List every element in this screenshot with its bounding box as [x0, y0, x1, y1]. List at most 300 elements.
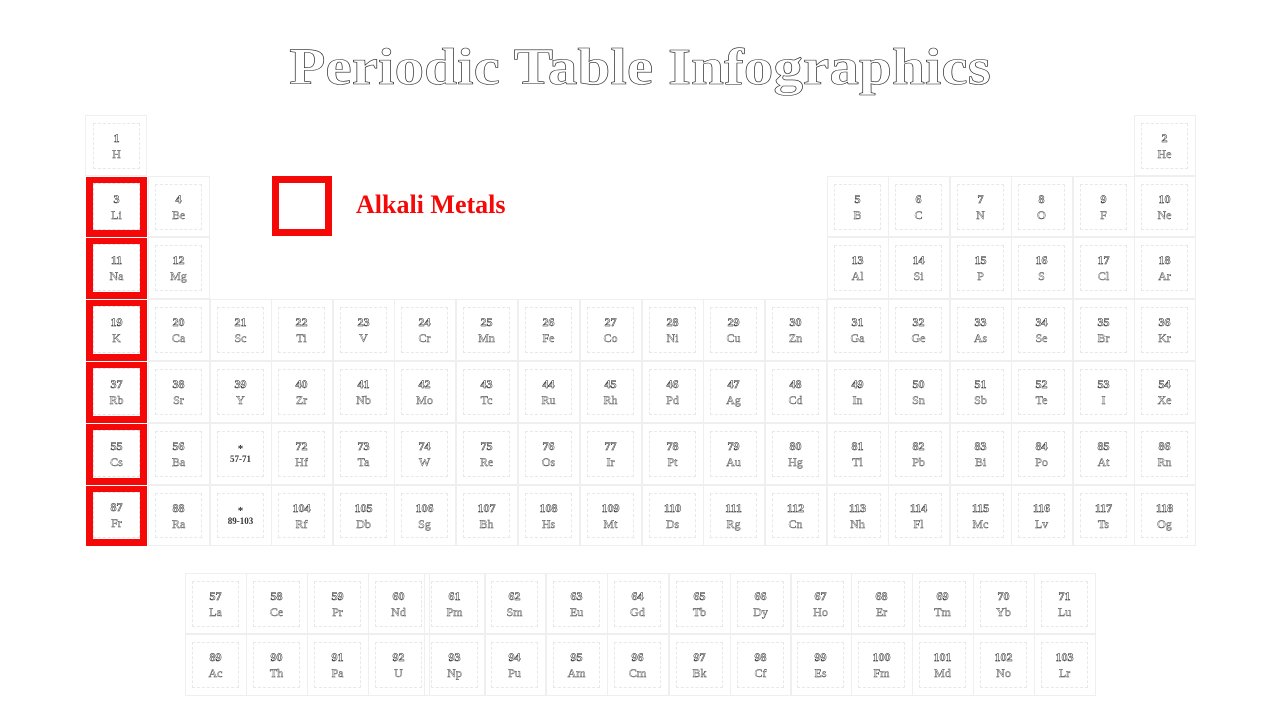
cell: Pr	[307, 573, 369, 634]
cell: Ru: 44	[542, 377, 554, 391]
cell: Sn: Sn	[912, 393, 925, 407]
cell: Mo: Mo	[416, 393, 433, 407]
cell: Mo: 42	[418, 377, 430, 391]
cell: Es	[790, 634, 852, 696]
cell: Bi	[950, 423, 1012, 485]
cell: F	[1073, 176, 1135, 237]
cell: I: 53	[1098, 377, 1110, 391]
cell: Pm: Pm	[446, 605, 462, 619]
cell: Er	[851, 573, 913, 634]
cell: Sm	[484, 573, 546, 634]
cell: Hf: Hf	[295, 455, 308, 469]
cell: lanthanide placeholder	[210, 423, 272, 485]
cell: Tb	[669, 573, 731, 634]
cell: Md: 101	[934, 650, 952, 664]
cell: Kr: Kr	[1158, 331, 1171, 345]
legend label: alkali metals: Alkali Metals	[356, 190, 506, 219]
cell: La	[185, 573, 247, 634]
cell: Os: Os	[542, 455, 555, 469]
cell: Ru	[518, 361, 580, 423]
cell: Bh	[456, 485, 518, 546]
cell: Y: 39	[234, 377, 246, 391]
cell: Dy	[730, 573, 792, 634]
cell: Er: 68	[876, 589, 888, 603]
cell: Pa	[307, 634, 369, 696]
cell: Os: 76	[542, 439, 554, 453]
cell: Tl	[827, 423, 889, 485]
cell: Mn: Mn	[478, 331, 495, 345]
cell: Nb: Nb	[356, 393, 371, 407]
cell: Fr: 87	[110, 500, 122, 514]
cell: Sb: 51	[974, 377, 986, 391]
cell: Bk: Bk	[692, 666, 706, 680]
cell: Nh: 113	[849, 500, 866, 514]
cell: Eu	[546, 573, 608, 634]
cell: Li: Li	[111, 208, 122, 222]
cell: Rn: 86	[1158, 439, 1170, 453]
cell: Pm	[424, 573, 486, 634]
cell: Mc: Mc	[972, 516, 988, 530]
cell: B: 5	[854, 192, 860, 206]
cell: Ra	[148, 485, 210, 546]
cell: Sn	[888, 361, 950, 423]
cell: K: K	[112, 330, 121, 344]
cell: Pd: 46	[666, 377, 678, 391]
cell: Po	[1011, 423, 1073, 485]
cell: At	[1073, 423, 1135, 485]
title: Periodic Table Infographics	[289, 39, 991, 96]
cell: Fe	[518, 299, 580, 361]
cell: Sg: 106	[416, 500, 434, 514]
cell: Ti: 22	[296, 315, 308, 329]
cell: Zr: Zr	[296, 393, 307, 407]
cell: Lu: 71	[1058, 589, 1070, 603]
cell: Rb	[86, 361, 147, 423]
cell: As	[950, 299, 1012, 361]
cell: Bh: 107	[478, 500, 496, 514]
cell: Lv	[1011, 485, 1073, 546]
cell: Ar	[1134, 237, 1196, 299]
cell: Te: 52	[1036, 377, 1048, 391]
cell: Sb: Sb	[974, 393, 987, 407]
cell: Tm: Tm	[934, 605, 951, 619]
cell: Ni: Ni	[666, 331, 678, 345]
cell: Ce	[246, 573, 308, 634]
cell: Pb: 82	[912, 439, 924, 453]
cell: B: B	[853, 208, 862, 222]
cell: Be	[148, 176, 210, 237]
cell: As: 33	[974, 315, 986, 329]
cell: Eu: Eu	[570, 605, 583, 619]
cell: Ni	[642, 299, 704, 361]
cell: Si	[888, 237, 950, 299]
cell: actinide placeholder: *	[238, 504, 243, 516]
cell: lanthanide placeholder: 57-71	[230, 454, 251, 464]
cell: actinide placeholder	[210, 485, 272, 546]
cell: Lu: Lu	[1058, 605, 1071, 619]
cell: Sb	[950, 361, 1012, 423]
cell: Ta: Ta	[358, 455, 369, 469]
cell: Lv: 116	[1033, 500, 1050, 514]
cell: U: 92	[392, 650, 404, 664]
cell: Mt: Mt	[603, 516, 618, 530]
cell: Be: 4	[176, 192, 182, 206]
cell: Tm	[912, 573, 974, 634]
cell: Na	[86, 237, 147, 299]
cell: Hg: 80	[790, 439, 802, 453]
cell: No: 102	[994, 650, 1012, 664]
cell: Fr	[86, 485, 147, 546]
cell: Sg	[394, 485, 456, 546]
cell: V: V	[359, 331, 368, 345]
cell: Li	[86, 176, 147, 237]
cell: Hs: Hs	[542, 516, 555, 530]
cell: Sc: 21	[234, 315, 246, 329]
cell: Te	[1011, 361, 1073, 423]
cell: Sn: 50	[912, 377, 924, 391]
cell: Pr: Pr	[332, 605, 343, 619]
cell: F: F	[1100, 208, 1107, 222]
cell: Ba: 56	[172, 439, 184, 453]
cell: Y: Y	[236, 393, 245, 407]
cell: W: 74	[418, 439, 430, 453]
cell: Fe: Fe	[542, 331, 554, 345]
cell: Mc: 115	[972, 500, 989, 514]
cell: Cf: 98	[754, 650, 766, 664]
cell: C: 6	[916, 192, 922, 206]
cell: Lr: 103	[1056, 650, 1074, 664]
cell: Tc: 43	[480, 377, 492, 391]
cell: Co: Co	[603, 331, 618, 345]
cell: Zr: 40	[296, 377, 308, 391]
cell: Np: 93	[448, 650, 460, 664]
cell: At: At	[1098, 455, 1110, 469]
cell: Co	[580, 299, 642, 361]
cell: Nd: Nd	[391, 605, 406, 619]
cell: Re: 75	[480, 439, 492, 453]
cell: Pu: Pu	[508, 666, 521, 680]
cell: H: 1	[114, 131, 120, 145]
cell: Am	[546, 634, 608, 696]
cell: Ga: Ga	[850, 331, 864, 345]
cell: Pr: 59	[332, 589, 344, 603]
cell: Fm: Fm	[873, 666, 890, 680]
cell: Au: 79	[728, 439, 740, 453]
cell: Am: 95	[570, 650, 582, 664]
cell: Ds: 110	[664, 500, 681, 514]
cell: At: 85	[1098, 439, 1110, 453]
cell: Mt	[580, 485, 642, 546]
cell: O	[1011, 176, 1073, 237]
cell: Fl	[888, 485, 950, 546]
cell: Th: Th	[270, 666, 283, 680]
cell: Sc: Sc	[234, 331, 246, 345]
cell: Rb: Rb	[109, 392, 124, 406]
cell: Tb: Tb	[693, 605, 706, 619]
cell: Ac	[185, 634, 247, 696]
cell: Rh: Rh	[603, 393, 618, 407]
cell: Yb: Yb	[996, 605, 1011, 619]
cell: Nh	[827, 485, 889, 546]
cell: Br: 35	[1098, 315, 1110, 329]
cell: Ba: Ba	[172, 455, 185, 469]
cell: Md: Md	[934, 666, 951, 680]
cell: actinide placeholder: 89-103	[228, 516, 253, 526]
cell: Db: 105	[354, 500, 372, 514]
cell: Rf	[271, 485, 333, 546]
cell: Tl: Tl	[852, 455, 863, 469]
cell: Rg: 111	[725, 500, 742, 514]
cell: Hg	[765, 423, 827, 485]
cell: Sm: Sm	[506, 605, 522, 619]
cell: Cd	[765, 361, 827, 423]
cell: S: S	[1038, 269, 1045, 283]
cell: S: 16	[1036, 253, 1048, 267]
cell: U: U	[394, 666, 403, 680]
cell: Ts: 117	[1095, 500, 1112, 514]
cell: In: In	[852, 393, 862, 407]
cell: Ba	[148, 423, 210, 485]
cell: Gd: Gd	[630, 605, 645, 619]
cell: Ar: Ar	[1158, 269, 1171, 283]
cell: Ca: Ca	[172, 331, 185, 345]
cell: Lr	[1034, 634, 1096, 696]
cell: As: As	[974, 331, 987, 345]
cell: Ga: 31	[852, 315, 864, 329]
cell: Rh	[580, 361, 642, 423]
cell: Sg: Sg	[418, 516, 431, 530]
cell: Nd	[368, 573, 430, 634]
cell: V	[333, 299, 395, 361]
cell: Hg: Hg	[788, 455, 803, 469]
cell: C: C	[914, 208, 922, 222]
cell: F: 9	[1100, 192, 1106, 206]
legend swatch: alkali metals	[272, 176, 332, 236]
cell: Ag	[703, 361, 765, 423]
cell: Ne	[1134, 176, 1196, 237]
cell: Xe: Xe	[1158, 393, 1172, 407]
cell: Cl	[1073, 237, 1135, 299]
cell: Pa: 91	[332, 650, 344, 664]
cell: Tl: 81	[852, 439, 864, 453]
cell: K: 19	[110, 314, 122, 328]
cell: He: 2	[1162, 131, 1168, 145]
cell: Ar: 18	[1158, 253, 1170, 267]
cell: Np: Np	[447, 666, 462, 680]
cell: Ho: 67	[814, 589, 826, 603]
cell: La: 57	[210, 589, 222, 603]
cell: Li: 3	[114, 192, 120, 206]
cell: Pd	[642, 361, 704, 423]
cell: Sr: Sr	[173, 393, 184, 407]
cell: O: 8	[1038, 192, 1044, 206]
cell: Cm: 96	[632, 650, 644, 664]
cell: Rg	[703, 485, 765, 546]
cell: Cr	[394, 299, 456, 361]
cell: Fm	[851, 634, 913, 696]
cell: Cm: Cm	[629, 666, 646, 680]
cell: Og: Og	[1157, 516, 1172, 530]
cell: Pd: Pd	[666, 393, 679, 407]
cell: Nb	[333, 361, 395, 423]
cell: Ca: 20	[172, 315, 184, 329]
cell: Fm: 100	[872, 650, 890, 664]
cell: Pa: Pa	[332, 666, 344, 680]
cell: O: O	[1037, 208, 1046, 222]
cell: Fl: Fl	[913, 516, 924, 530]
cell: Hs: 108	[540, 500, 558, 514]
cell: Hf	[271, 423, 333, 485]
cell: Ca	[148, 299, 210, 361]
cell: Lu	[1034, 573, 1096, 634]
cell: Y	[210, 361, 272, 423]
cell: Bi: 83	[974, 439, 986, 453]
cell: Fe: 26	[542, 315, 554, 329]
cell: Al	[827, 237, 889, 299]
cell: Dy: Dy	[753, 605, 768, 619]
cell: C	[888, 176, 950, 237]
cell: S	[1011, 237, 1073, 299]
cell: Tc	[456, 361, 518, 423]
cell: Pb: Pb	[912, 455, 925, 469]
cell: P	[950, 237, 1012, 299]
cell: Br: Br	[1098, 331, 1110, 345]
cell: Mn	[456, 299, 518, 361]
cell: Xe	[1134, 361, 1196, 423]
cell: Ge: 32	[912, 315, 924, 329]
cell: Cn	[765, 485, 827, 546]
cell: Rg: Rg	[726, 516, 740, 530]
cell: U	[368, 634, 430, 696]
cell: N: N	[976, 208, 985, 222]
cell: Cu: 29	[728, 315, 740, 329]
cell: Ru: Ru	[541, 393, 556, 407]
cell: No	[973, 634, 1035, 696]
cell: Cn: Cn	[788, 516, 802, 530]
cell: Pt: Pt	[667, 455, 678, 469]
cell: Cu	[703, 299, 765, 361]
cell: Ho: Ho	[813, 605, 828, 619]
cell: B	[827, 176, 889, 237]
cell: Th	[246, 634, 308, 696]
cell: Tm: 69	[936, 589, 948, 603]
cell: Ts	[1073, 485, 1135, 546]
cell: Es: Es	[814, 666, 826, 680]
cell: Nb: 41	[358, 377, 370, 391]
cell: Bk	[669, 634, 731, 696]
cell: W	[394, 423, 456, 485]
cell: lanthanide placeholder: *	[238, 443, 243, 455]
cell: Si: 14	[912, 253, 924, 267]
cell: Au	[703, 423, 765, 485]
cell: Ga	[827, 299, 889, 361]
cell: Mg: Mg	[170, 269, 187, 283]
cell: Am: Am	[568, 666, 586, 680]
cell: Po: 84	[1036, 439, 1048, 453]
cell: Tb: 65	[694, 589, 706, 603]
cell: Ag: 47	[728, 377, 740, 391]
cell: Mn: 25	[480, 315, 492, 329]
cell: Cf	[730, 634, 792, 696]
cell: Ge	[888, 299, 950, 361]
cell: Br	[1073, 299, 1135, 361]
cell: Cd: Cd	[788, 393, 802, 407]
cell: N: 7	[978, 192, 984, 206]
cell: Xe: 54	[1158, 377, 1170, 391]
cell: Mg: 12	[172, 253, 184, 267]
cell: Rh: 45	[604, 377, 616, 391]
cell: Sr	[148, 361, 210, 423]
cell: Ag: Ag	[726, 393, 741, 407]
cell: Cu: Cu	[726, 331, 740, 345]
cell: Ds: Ds	[666, 516, 679, 530]
cell: Rn: Rn	[1157, 455, 1172, 469]
cell: Se: Se	[1036, 331, 1048, 345]
cell: Si: Si	[913, 269, 924, 283]
cell: Ce: 58	[270, 589, 282, 603]
cell: Cf: Cf	[754, 666, 766, 680]
cell: Mc	[950, 485, 1012, 546]
cell: Sm: 62	[508, 589, 520, 603]
cell: In	[827, 361, 889, 423]
cell: Md	[912, 634, 974, 696]
cell: Al: 13	[852, 253, 864, 267]
cell: Fl: 114	[910, 500, 927, 514]
cell: K	[86, 299, 147, 361]
cell: Db	[333, 485, 395, 546]
cell: Po: Po	[1035, 455, 1048, 469]
cell: Al: Al	[852, 269, 864, 283]
cell: Gd	[607, 573, 669, 634]
cell: Cs	[86, 423, 147, 485]
cell: Pu	[484, 634, 546, 696]
cell: I	[1073, 361, 1135, 423]
cell: Ni: 28	[666, 315, 678, 329]
cell: Sr: 38	[172, 377, 184, 391]
cell: Na: 11	[111, 252, 122, 266]
cell: Rn	[1134, 423, 1196, 485]
cell: Zn	[765, 299, 827, 361]
cell: Hs	[518, 485, 580, 546]
cell: Pb	[888, 423, 950, 485]
cell: Og: 118	[1156, 500, 1173, 514]
cell: H: H	[112, 147, 121, 161]
cell: He: He	[1158, 147, 1172, 161]
cell: Gd: 64	[632, 589, 644, 603]
cell: Cl: Cl	[1098, 269, 1109, 283]
cell: Cn: 112	[787, 500, 804, 514]
cell: Rf: 104	[292, 500, 310, 514]
cell: Pt	[642, 423, 704, 485]
cell: N	[950, 176, 1012, 237]
cell: La: La	[209, 605, 222, 619]
cell: Na: Na	[110, 268, 124, 282]
cell: Lv: Lv	[1035, 516, 1048, 530]
cell: Ti: Ti	[296, 331, 307, 345]
cell: Ne: 10	[1158, 192, 1170, 206]
main table	[85, 115, 1196, 546]
cell: Cs: 55	[110, 438, 122, 452]
cell: Cr: Cr	[418, 331, 430, 345]
cell: Zn: Zn	[789, 331, 802, 345]
cell: Kr: 36	[1158, 315, 1170, 329]
cell: In: 49	[852, 377, 864, 391]
cell: W: W	[419, 455, 430, 469]
cell: Cm	[607, 634, 669, 696]
cell: Ge: Ge	[912, 331, 926, 345]
cell: P: 15	[974, 253, 986, 267]
cell: He	[1134, 115, 1196, 176]
